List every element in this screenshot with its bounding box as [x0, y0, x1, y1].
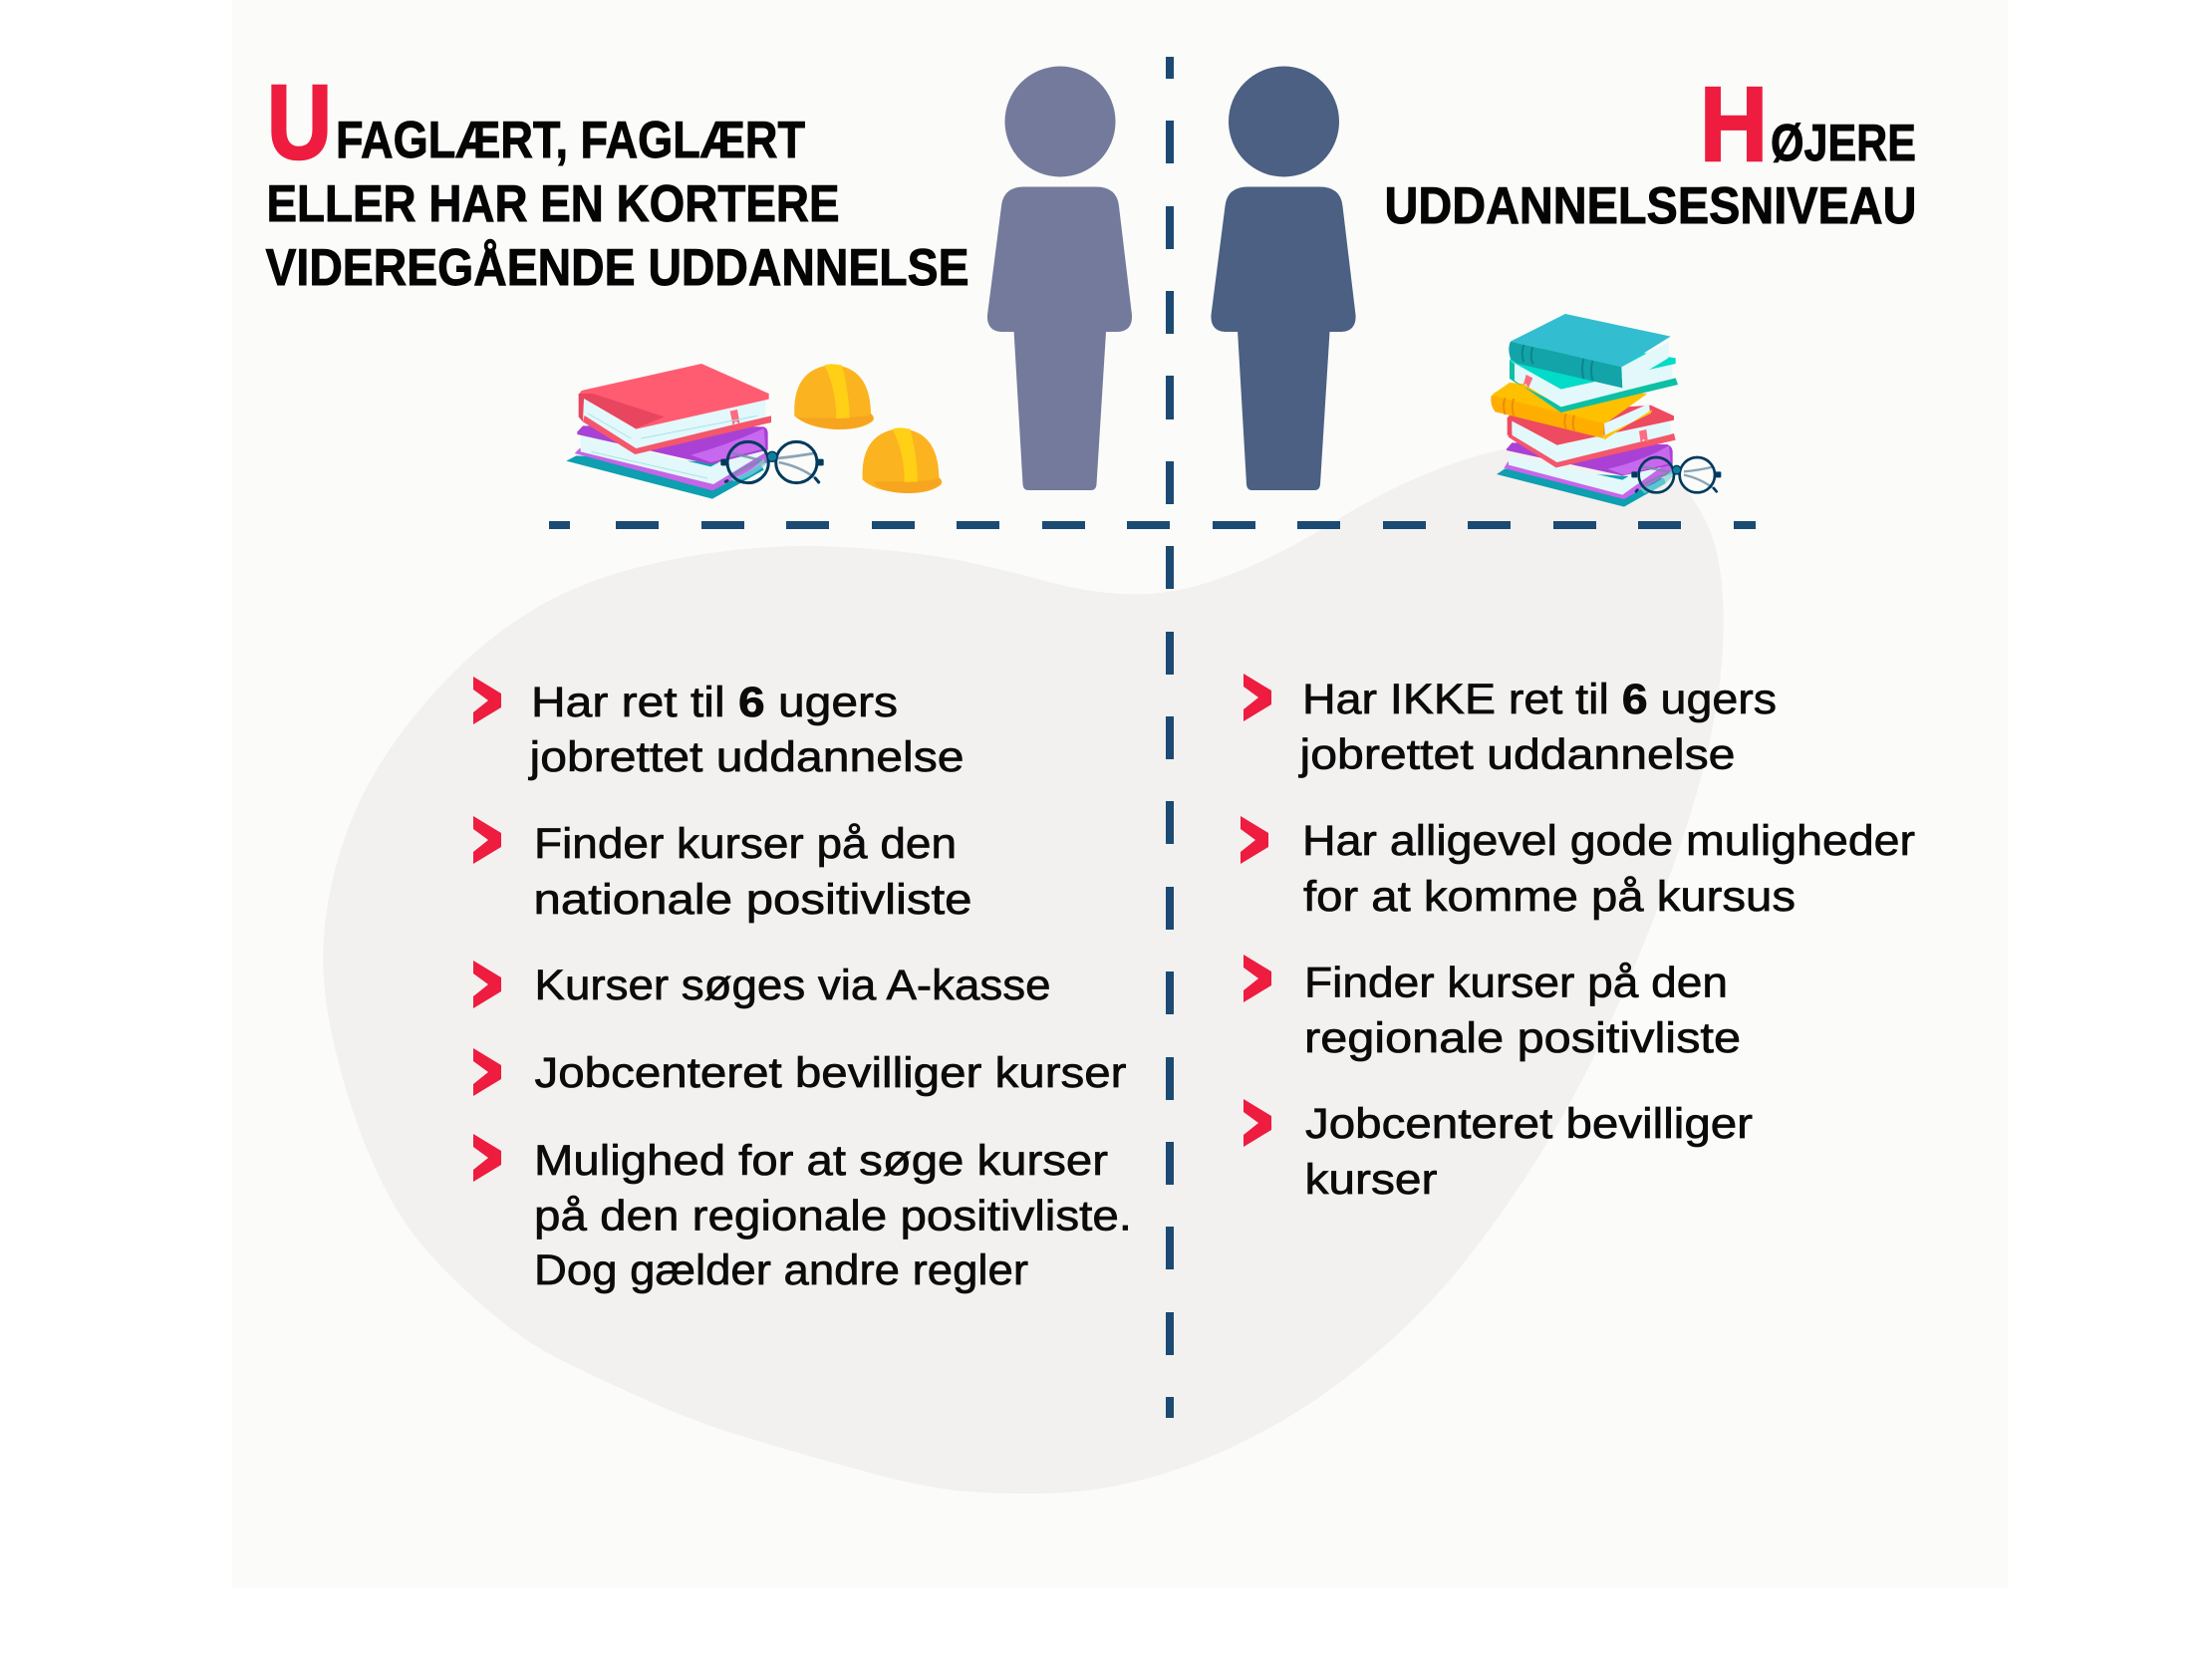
icon: person left	[987, 66, 1132, 490]
bullet: item 1	[473, 677, 501, 724]
text: item 2	[1302, 817, 1915, 921]
heading: left	[265, 64, 968, 297]
text: item 2: for at komme på kursus	[1303, 873, 1796, 921]
bullet: item 4	[1244, 1099, 1271, 1147]
text: item 4	[1305, 1100, 1753, 1204]
bullet: item 3	[1244, 955, 1271, 1002]
text: item 2: Finder kurser på den	[534, 820, 957, 868]
text: item 5: Dog gælder andre regler	[534, 1246, 1028, 1294]
text: item 1: jobrettet uddannelse	[527, 733, 965, 781]
bullet: item 2	[473, 816, 501, 864]
text: item 3	[1304, 959, 1741, 1062]
text: item 5: på den regionale positivliste.	[534, 1192, 1132, 1240]
bullet: item 5	[473, 1134, 501, 1182]
bullet: item 3	[473, 961, 501, 1008]
text: item 1: Har IKKE ret til 6 ugers	[1302, 676, 1777, 723]
background panel	[232, 0, 2008, 1588]
text: item 1: Har ret til 6 ugers	[531, 679, 898, 726]
list: right column	[1241, 674, 1915, 1204]
text: item 1	[527, 679, 965, 781]
heading: left: U	[267, 64, 332, 181]
icon: person right	[1211, 66, 1356, 490]
bullet: item 4	[473, 1048, 501, 1096]
text: item 1: jobrettet uddannelse	[1297, 731, 1736, 779]
bullet: item 2	[1241, 816, 1268, 864]
text: item 2	[534, 820, 972, 924]
background blob	[323, 442, 1724, 1494]
heading: right: H	[1700, 66, 1768, 183]
text: item 2: nationale positivliste	[534, 876, 972, 924]
text: item 3: regionale positivliste	[1304, 1014, 1741, 1062]
list: left column	[473, 677, 1132, 1294]
bullet: item 1	[1244, 674, 1271, 721]
text: item 2: Har alligevel gode muligheder	[1302, 817, 1915, 865]
text: item 4: Jobcenteret bevilliger kurser	[534, 1049, 1126, 1097]
heading: left: ELLER HAR EN KORTERE	[267, 175, 839, 233]
text: item 5: Mulighed for at søge kurser	[534, 1137, 1108, 1185]
vertical dashes	[1166, 57, 1174, 1418]
heading: left: FAGLÆRT, FAGLÆRT	[336, 112, 805, 169]
horizontal dashes	[549, 521, 1756, 529]
icon: stack of books and glasses right	[1491, 314, 1721, 507]
heading: right: ØJERE	[1771, 115, 1916, 172]
text: item 4: Jobcenteret bevilliger	[1305, 1100, 1753, 1148]
text: item 4: kurser	[1305, 1156, 1437, 1204]
text: item 3: Finder kurser på den	[1304, 959, 1728, 1006]
heading: right: UDDANNELSESNIVEAU	[1385, 177, 1917, 235]
icon: books, glasses and helmets left	[566, 364, 942, 499]
text: item 3: Kurser søges via A-kasse	[534, 962, 1050, 1009]
heading: left: VIDEREGÅENDE UDDANNELSE	[265, 239, 968, 297]
heading: right	[1385, 66, 1917, 235]
text: item 5	[534, 1137, 1132, 1294]
text: item 1	[1297, 676, 1777, 779]
